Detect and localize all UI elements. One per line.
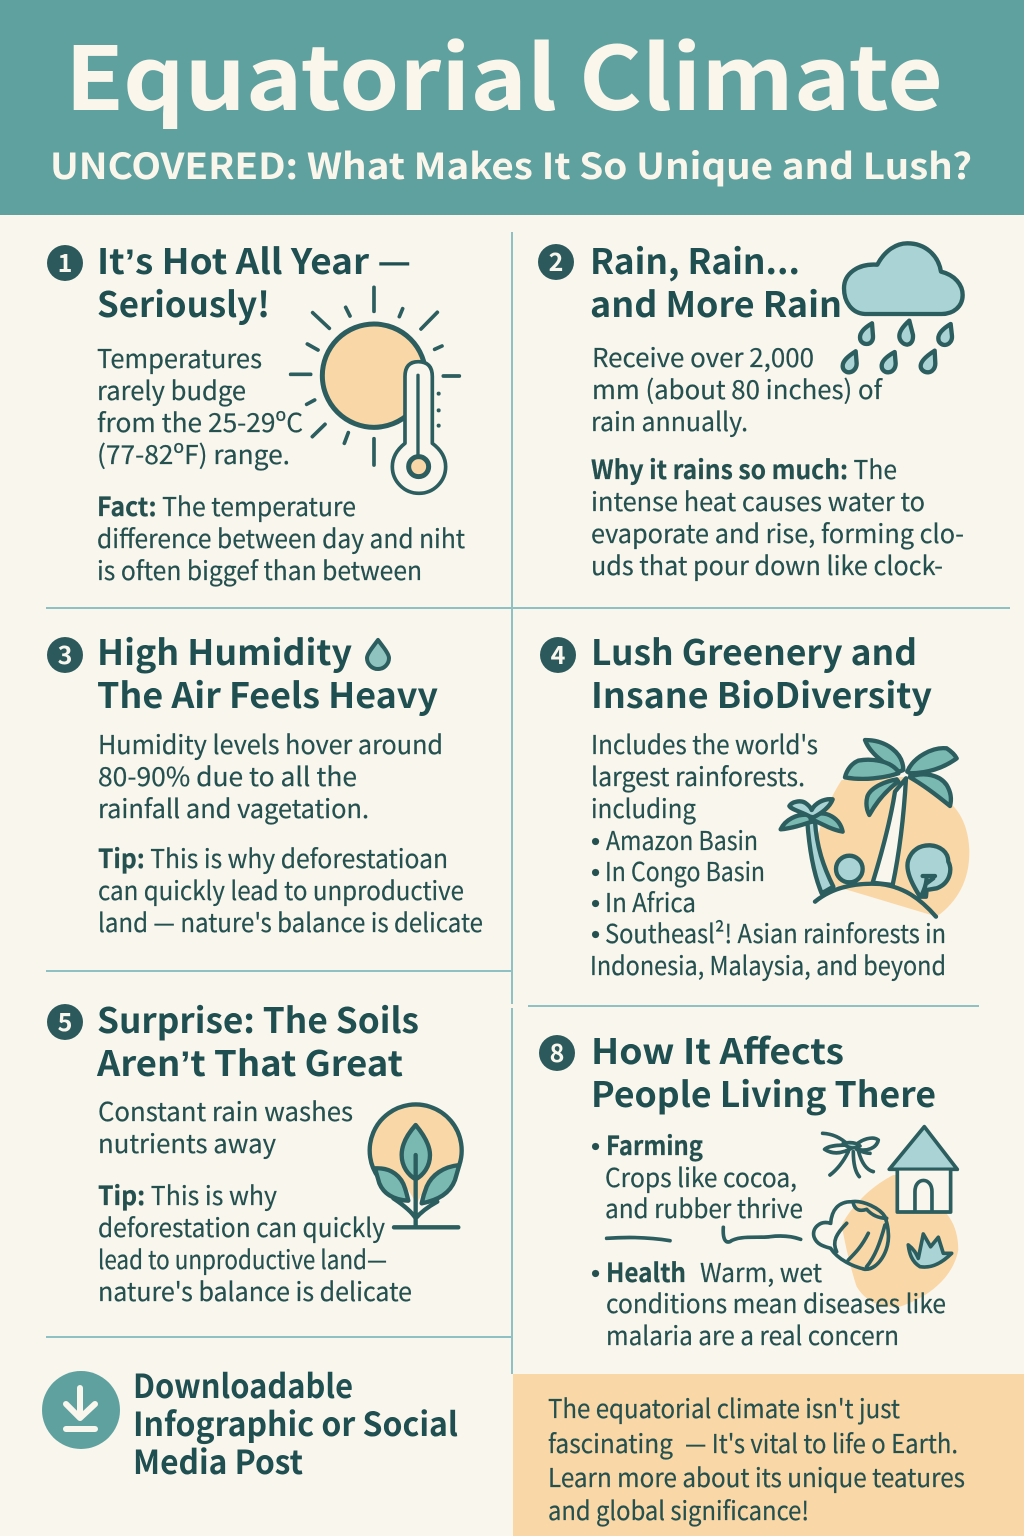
people text: Farming <box>606 1126 703 1163</box>
heading 2 <box>590 234 842 328</box>
callout: The equatorial climate isn't just <box>548 1389 900 1426</box>
rainfall text <box>591 338 884 439</box>
fact text <box>97 487 465 588</box>
number badge 3 <box>47 636 83 673</box>
biodiversity text: Southeasl²! Asian rainforests in <box>605 914 946 951</box>
heading 8: People Living There <box>591 1067 936 1118</box>
why it rains text: intense heat causes water to <box>591 482 925 519</box>
soil tip text: Tip: This is why <box>98 1176 277 1213</box>
why it rains text <box>591 450 964 583</box>
panel: rain <box>538 234 964 583</box>
heading 5 <box>96 993 419 1087</box>
heading 3: High Humidity <box>97 625 352 676</box>
fact text: difference between day and niht <box>97 519 465 556</box>
temperature text: from the 25-29ºC <box>97 403 303 440</box>
panel: soils <box>47 993 462 1309</box>
biodiversity text: Includes the world's <box>591 725 818 762</box>
soil text <box>98 1092 353 1161</box>
title: Equatorial Climate <box>65 9 943 136</box>
rainfall text: Receive over 2,000 <box>592 338 814 375</box>
number badge 8 <box>539 1034 575 1071</box>
heading 4: Lush Greenery and <box>591 625 917 676</box>
download label: Infographic or Social <box>133 1398 458 1446</box>
biodiversity text: In Congo Basin <box>605 852 765 889</box>
subtitle: UNCOVERED: What Makes It So Unique and Lush? <box>50 138 972 190</box>
heading 1: Seriously! <box>97 277 270 328</box>
soil tip text: lead to unproductive land— <box>98 1240 387 1277</box>
temperature text: rarely budge <box>97 371 246 408</box>
panel: hot all year <box>47 234 465 588</box>
soil tip text <box>98 1176 412 1309</box>
biodiversity text: • <box>591 888 600 918</box>
rainfall text: mm (about 80 inches) of <box>592 370 884 407</box>
soil text: nutrients away <box>98 1124 276 1161</box>
temperature text: Temperatures <box>97 339 262 376</box>
heading 8: How It Affects <box>591 1024 844 1075</box>
biodiversity text: • <box>591 919 600 949</box>
soil tip text: nature's balance is delicate <box>98 1272 412 1309</box>
panel: biodiversity <box>540 625 969 983</box>
humidity text: rainfall and vagetation. <box>98 789 369 826</box>
callout: — It's vital to life o Earth. <box>685 1424 958 1461</box>
people text: Health <box>606 1253 686 1290</box>
tip text <box>98 839 483 940</box>
biodiversity text: including <box>591 789 696 826</box>
number badge 4: 4 <box>551 636 566 672</box>
heading 2: Rain, Rain... <box>590 234 800 285</box>
fact text: is often biggef than between <box>97 551 422 588</box>
humidity text: 80-90% due to all the <box>98 757 357 794</box>
rainfall text: rain annually. <box>591 402 748 439</box>
why it rains text: Why it rains so much: The <box>591 450 897 487</box>
why it rains text: uds that pour down like clock- <box>591 546 943 583</box>
heading 1: It’s Hot All Year — <box>97 234 411 285</box>
heading 1 <box>97 234 411 328</box>
heading 8 <box>591 1024 936 1118</box>
icon: seedling <box>370 1104 462 1227</box>
people text: • <box>591 1258 600 1288</box>
people text: Crops like cocoa, <box>605 1158 797 1195</box>
number badge 5: 5 <box>58 1003 72 1039</box>
humidity text: Humidity levels hover around <box>98 725 443 762</box>
panel: humidity <box>47 625 483 940</box>
download call to action <box>42 1360 458 1484</box>
icon: download <box>42 1371 120 1449</box>
icon: sun and thermometer <box>291 287 459 493</box>
number badge 3: 3 <box>58 636 72 672</box>
biodiversity text: • <box>591 826 600 856</box>
people text: Warm, wet <box>700 1253 822 1290</box>
heading 5: Surprise: The Soils <box>97 993 419 1044</box>
biodiversity text: In Africa <box>605 883 696 920</box>
temperature text <box>97 339 303 472</box>
people text: conditions mean diseases like <box>606 1284 946 1321</box>
biodiversity text: Indonesia, Malaysia, and beyond <box>590 946 946 983</box>
download label: Downloadable <box>133 1360 353 1408</box>
temperature text: (77-82ºF) range. <box>97 435 290 472</box>
heading 4: Insane BioDiversity <box>591 668 932 719</box>
number badge 4 <box>540 636 576 673</box>
header banner <box>0 0 1024 215</box>
heading 5: Aren’t That Great <box>96 1036 403 1087</box>
biodiversity text <box>590 725 946 983</box>
tip text: Tip: This is why deforestatioan <box>98 839 448 876</box>
number badge 1 <box>47 244 83 281</box>
download label: Media Post <box>133 1436 303 1484</box>
download label <box>133 1360 458 1484</box>
icon: village, mosquito and crops <box>607 1127 958 1307</box>
soil tip text: deforestation can quickly <box>98 1208 385 1245</box>
number badge 8: 8 <box>550 1034 564 1070</box>
panel: people <box>539 1024 958 1353</box>
number badge 2: 2 <box>549 243 563 279</box>
tip text: land — nature's balance is delicate <box>98 903 483 940</box>
callout <box>513 1374 1024 1536</box>
tip text: can quickly lead to unproductive <box>98 871 464 908</box>
heading 4 <box>591 625 932 719</box>
callout: Learn more about its unique teatures <box>548 1458 965 1495</box>
fact text: Fact: The temperature <box>97 487 356 524</box>
why it rains text: evaporate and rise, forming clo- <box>591 514 964 551</box>
callout: fascinating <box>548 1424 673 1461</box>
icon: rain cloud <box>843 243 963 372</box>
biodiversity text: • <box>591 857 600 887</box>
people text: and rubber thrive <box>605 1189 803 1226</box>
heading 3 <box>97 625 438 719</box>
people text: • <box>591 1131 600 1161</box>
people text: malaria are a real concern <box>606 1316 899 1353</box>
heading 3: The Air Feels Heavy <box>97 668 438 719</box>
humidity text <box>98 725 443 826</box>
number badge 2 <box>538 243 574 280</box>
number badge 1: 1 <box>58 244 72 280</box>
people text <box>591 1126 946 1353</box>
icon: palm trees <box>781 740 969 917</box>
callout: and global significance! <box>548 1491 809 1528</box>
biodiversity text: largest rainforests. <box>591 757 805 794</box>
number badge 5 <box>47 1003 83 1040</box>
biodiversity text: Amazon Basin <box>606 821 758 858</box>
soil text: Constant rain washes <box>98 1092 353 1129</box>
heading 2: and More Rain <box>590 277 842 328</box>
icon: water drop <box>367 640 389 669</box>
